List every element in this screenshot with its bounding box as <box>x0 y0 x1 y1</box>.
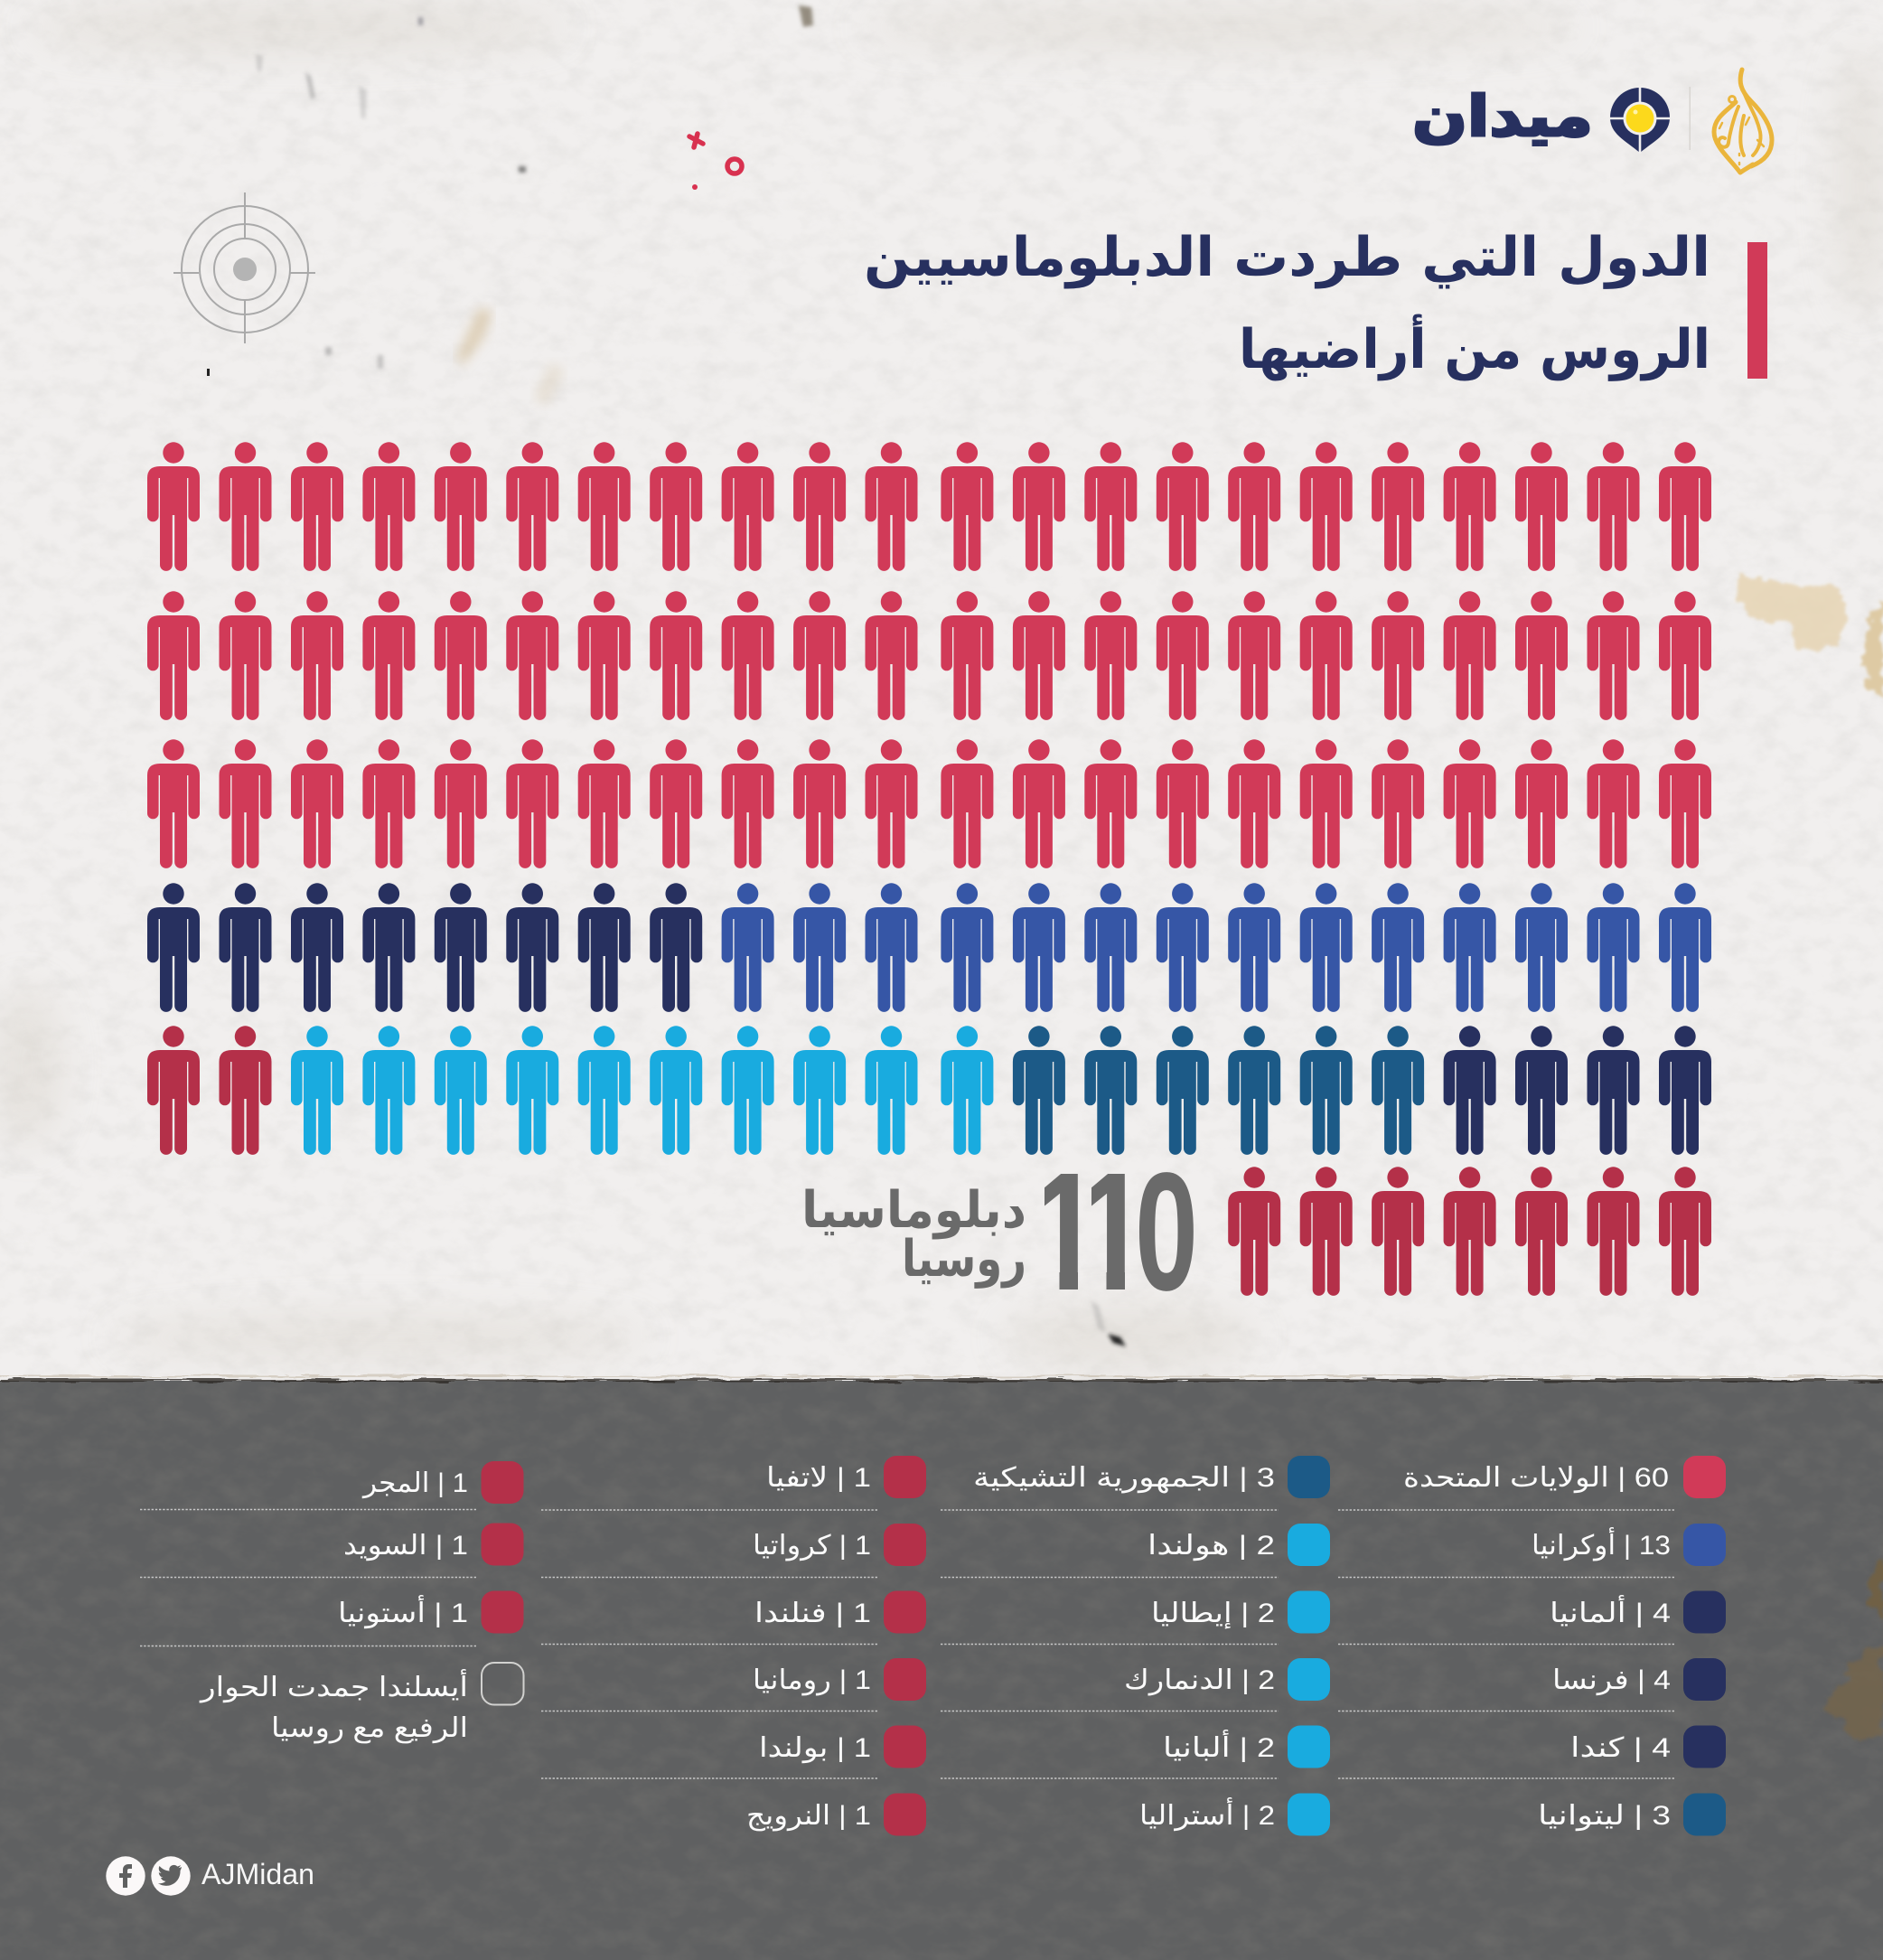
divider beside logos <box>1690 87 1691 150</box>
decorative marks: x, ring, dot <box>689 134 742 190</box>
pictogram chart: 110 diplomats <box>147 442 1711 1296</box>
logo: Al Jazeera <box>1714 70 1772 173</box>
Albania <box>1163 1726 1330 1768</box>
legend: column 2 <box>941 1456 1330 1836</box>
Estonia: 1 | أستونيا <box>338 1594 468 1628</box>
Ukraine <box>1532 1524 1726 1566</box>
Denmark: 2 | الدنمارك <box>1124 1665 1275 1695</box>
row 1: United States <box>147 442 1711 571</box>
total caption: روسيا <box>902 1230 1026 1289</box>
social handle: AJMidan <box>201 1858 314 1890</box>
Finland: 1 | فنلندا <box>754 1599 871 1628</box>
row 2: United States <box>147 591 1711 720</box>
Netherlands <box>1148 1524 1330 1566</box>
title <box>864 226 1710 381</box>
Sweden <box>343 1524 524 1565</box>
Australia: 2 | أستراليا <box>1139 1796 1275 1831</box>
Latvia <box>766 1456 926 1498</box>
Sweden: 1 | السويد <box>343 1531 468 1561</box>
legend: column 1 <box>1338 1456 1726 1836</box>
Canada <box>1570 1726 1726 1768</box>
Lithuania <box>1538 1793 1726 1836</box>
Netherlands: 2 | هولندا <box>1148 1531 1275 1561</box>
Czech Republic: 3 | الجمهورية التشيكية <box>973 1463 1275 1494</box>
icon: twitter <box>151 1856 191 1896</box>
icon: facebook <box>106 1856 145 1896</box>
Croatia: 1 | كرواتيا <box>753 1531 871 1561</box>
Germany <box>1550 1590 1726 1634</box>
total caption <box>801 1181 1026 1289</box>
Italy <box>1151 1590 1330 1634</box>
Poland: 1 | بولندا <box>759 1733 871 1763</box>
total number: 1 <box>1030 1139 1102 1326</box>
background: paper texture <box>0 0 1883 1383</box>
France <box>1552 1658 1726 1701</box>
Hungary: 1 | المجر <box>361 1468 468 1498</box>
logo: Midan wordmark: ميدان <box>1412 83 1593 149</box>
Romania: 1 | رومانيا <box>753 1665 871 1696</box>
row 6: dark red figures <box>1228 1167 1711 1296</box>
France: 4 | فرنسا <box>1552 1665 1671 1695</box>
total number <box>1045 1172 1194 1291</box>
Iceland note <box>199 1663 523 1744</box>
title accent bar <box>1747 242 1767 379</box>
row 5: light blue figures <box>291 1026 993 1155</box>
legend: column 3 <box>541 1456 926 1836</box>
United States: 60 | الولايات المتحدة <box>1403 1463 1669 1493</box>
Iceland note: الرفيع مع روسيا <box>271 1713 468 1744</box>
Czech Republic <box>973 1456 1330 1498</box>
Italy: 2 | إيطاليا <box>1151 1599 1275 1629</box>
Denmark <box>1124 1658 1330 1701</box>
Hungary <box>361 1461 524 1504</box>
title: الدول التي طردت الدبلوماسيين <box>864 226 1710 289</box>
total number: 1 <box>1077 1139 1149 1326</box>
row 4: navy figures <box>147 883 702 1012</box>
United States <box>1403 1456 1726 1498</box>
total caption: دبلوماسيا <box>801 1181 1026 1240</box>
logo: Midan icon <box>1609 87 1671 154</box>
Ukraine: 13 | أوكرانيا <box>1532 1526 1671 1561</box>
Croatia <box>753 1524 926 1566</box>
Norway: 1 | النرويج <box>746 1801 871 1832</box>
Romania <box>753 1658 926 1701</box>
Latvia: 1 | لاتفيا <box>766 1463 871 1493</box>
icon: target crosshair <box>173 192 315 343</box>
Germany: 4 | ألمانيا <box>1550 1594 1671 1628</box>
row 3: United States <box>147 739 1711 868</box>
Norway <box>746 1793 926 1836</box>
total number: 0 <box>1135 1139 1198 1326</box>
row 5: dark red figures <box>147 1026 271 1155</box>
background: dark lower panel <box>0 1375 1883 1960</box>
Lithuania: 3 | ليتوانيا <box>1538 1801 1671 1831</box>
row 4: Ukraine figures <box>722 883 1711 1012</box>
legend: column 4 <box>140 1461 524 1744</box>
row 5: teal-blue figures <box>1013 1026 1424 1155</box>
Canada: 4 | كندا <box>1570 1733 1671 1763</box>
Iceland note: أيسلندا جمدت الحوار <box>199 1668 468 1702</box>
Finland <box>754 1590 926 1634</box>
Poland <box>759 1726 926 1768</box>
Estonia <box>338 1590 524 1634</box>
Australia <box>1139 1793 1330 1836</box>
Albania: 2 | ألبانيا <box>1163 1729 1275 1763</box>
title: الروس من أراضيها <box>1239 314 1710 381</box>
row 5: navy figures <box>1444 1026 1711 1155</box>
